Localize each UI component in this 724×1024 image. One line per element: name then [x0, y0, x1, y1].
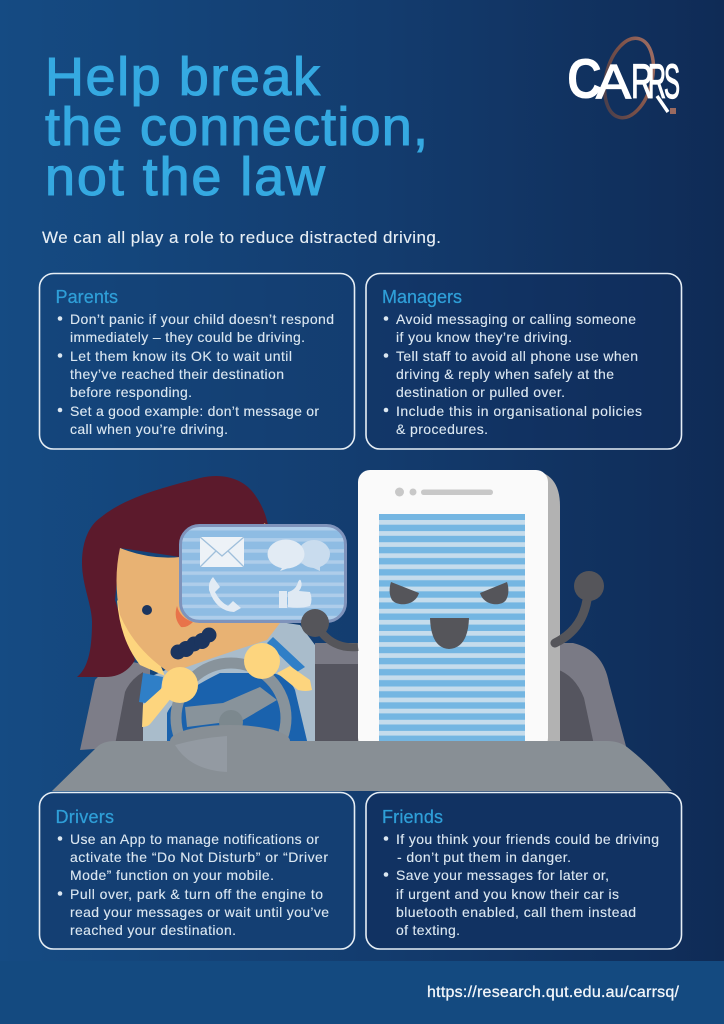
subtitle: We can all play a role to reduce distracted driving.: [42, 228, 441, 247]
bullet list: managers: destination or pulled over.: [396, 384, 565, 400]
panel: drivers: [40, 792, 354, 949]
driver arms and hands: [142, 643, 312, 727]
steering wheel: [176, 663, 286, 773]
bullet list: drivers: Pull over, park & turn off the engine to: [70, 886, 323, 902]
logo: CARRS: R: [648, 56, 666, 109]
phone character: [358, 470, 604, 750]
bullet list: drivers: Use an App to manage notifications or: [70, 831, 319, 847]
icon: speech bubbles: [268, 540, 330, 571]
phone body: [530, 470, 560, 745]
driver seat backing: [143, 622, 315, 745]
driver face: [116, 523, 290, 673]
panel: friends: [366, 792, 682, 949]
heading: drivers: Drivers: [56, 807, 114, 827]
title: the connection,: [45, 97, 428, 157]
bullet list: parents: before responding.: [70, 384, 192, 400]
panel: parents: [40, 274, 354, 449]
icon: thumbs up: [279, 580, 312, 608]
footer url: https://research.qut.edu.au/carrsq/: [427, 984, 680, 1001]
middle seat: [315, 643, 365, 744]
title: Help break: [45, 47, 321, 107]
bullet list: managers: if you know they’re driving.: [396, 329, 572, 345]
right car seat: [556, 643, 627, 750]
bullet list: parents: Set a good example: don’t message or: [70, 403, 319, 419]
logo: CARRS: C: [567, 47, 602, 111]
notification bubble: [180, 526, 346, 622]
phone screen: [379, 514, 525, 744]
bullet list: parents: Let them know its OK to wait until: [70, 348, 292, 364]
icon: envelope: [200, 537, 244, 567]
phone left arm: [301, 609, 358, 647]
title: [45, 47, 428, 207]
driver neck shadow: [117, 600, 165, 676]
bullet list: parents: they’ve reached their destination: [70, 366, 284, 382]
driver eye: [142, 605, 152, 615]
bullet list: friends: If you think your friends could be driving: [396, 831, 659, 847]
phone mouth: [430, 618, 469, 649]
left car seat: [80, 662, 150, 750]
bullet list: managers: & procedures.: [396, 421, 488, 437]
bullet list: friends: if urgent and you know their car is: [396, 886, 619, 902]
phone speaker: [395, 488, 493, 496]
panel: managers: [366, 274, 682, 449]
bullet list: parents: immediately – they could be driving.: [70, 329, 305, 345]
footer band: [0, 961, 724, 1024]
bullet list: parents: [58, 311, 334, 437]
bullet list: managers: [384, 311, 642, 437]
logo: CARRS: [567, 33, 680, 123]
bullet list: friends: - don’t put them in danger.: [397, 849, 571, 865]
heading: managers: Managers: [382, 287, 462, 307]
title: not the law: [45, 147, 326, 207]
phone right arm: [555, 571, 604, 643]
bullet list: managers: Tell staff to avoid all phone use when: [396, 348, 638, 364]
bullet list: drivers: activate the “Do Not Disturb” or “Driver: [70, 849, 328, 865]
bullet list: friends: bluetooth enabled, call them instead: [396, 904, 636, 920]
icon: telephone: [209, 577, 241, 612]
bullet list: parents: call when you’re driving.: [70, 421, 228, 437]
heading: friends: Friends: [382, 807, 443, 827]
driver collar: [139, 637, 305, 705]
dashboard: [52, 725, 672, 791]
bullet list: friends: of texting.: [396, 922, 460, 938]
heading: parents: Parents: [56, 287, 118, 307]
illustration: driver and phone in car: [52, 470, 672, 791]
bullet list: drivers: [58, 831, 329, 938]
bullet list: drivers: Mode” function on your mobile.: [70, 867, 274, 883]
text: S: [664, 56, 680, 109]
bullet list: parents: Don’t panic if your child doesn’t respond: [70, 311, 334, 327]
bullet list: drivers: reached your destination.: [70, 922, 236, 938]
bullet list: managers: Avoid messaging or calling someone: [396, 311, 636, 327]
driver torso: [167, 673, 308, 745]
driver nose: [176, 606, 193, 627]
logo: CARRS: R: [631, 56, 653, 109]
bullet list: drivers: read your messages or wait until you’ve: [70, 904, 329, 920]
bullet list: managers: Include this in organisational policies: [396, 403, 642, 419]
bullet list: managers: driving & reply when safely at the: [396, 366, 614, 382]
bullet list: friends: [384, 831, 659, 938]
bullet list: friends: Save your messages for later or,: [396, 867, 609, 883]
phone eyes: [390, 582, 508, 604]
driver mouth: [170, 628, 216, 660]
logo: CARRS: A: [596, 56, 631, 109]
driver hair: [77, 476, 280, 677]
